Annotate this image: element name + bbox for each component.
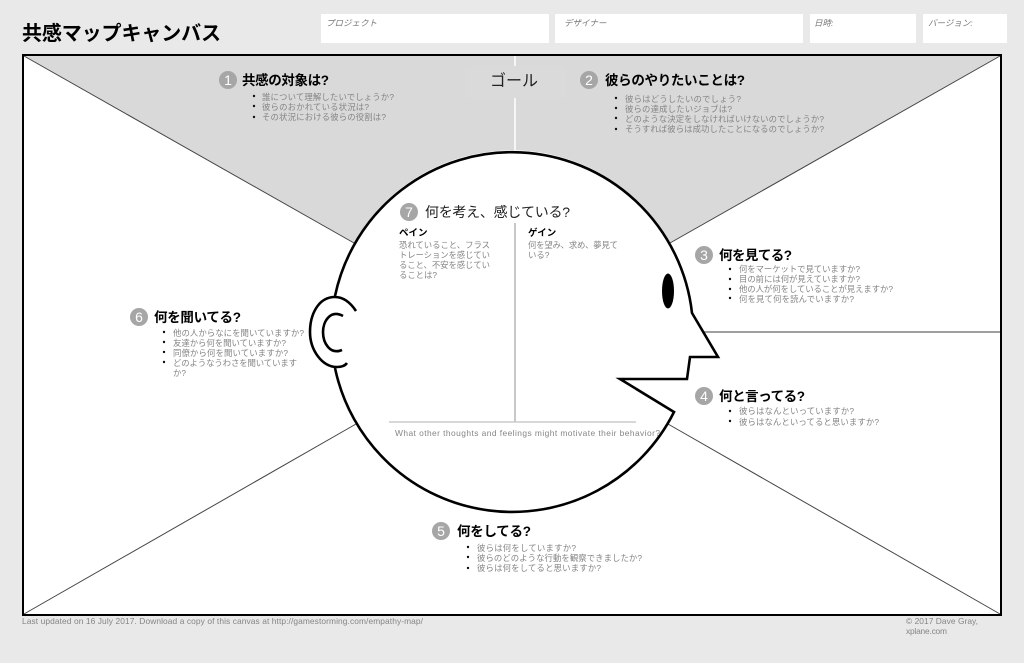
- gains: ゲイン: [528, 227, 556, 239]
- ear outer: [310, 297, 356, 367]
- section 2: what they need to do: 彼らの達成したいジョブは?: [625, 104, 732, 114]
- field: version: [923, 14, 1007, 43]
- section 5: do: 5: [437, 523, 445, 539]
- ear inner: [323, 314, 343, 351]
- section 3: see: 何を見てる?: [719, 248, 792, 263]
- section 5: do: 彼らのどのような行動を観察できましたか?: [477, 553, 642, 563]
- section 1: who: 誰について理解したいでしょうか?: [262, 92, 394, 102]
- diagonal divider: upper right: [670, 56, 1000, 243]
- section 4: say: 何と言ってる?: [719, 389, 805, 404]
- section 6: hear: [130, 308, 304, 378]
- gains: いる?: [528, 250, 550, 260]
- section 1: who: その状況における彼らの役割は?: [262, 112, 386, 122]
- pains: [399, 228, 490, 280]
- diagonal divider: lower left: [24, 424, 356, 614]
- section 2: what they need to do: 2: [585, 72, 593, 88]
- section 6: hear: か?: [173, 368, 186, 378]
- field: date: [810, 14, 916, 43]
- field: project: [321, 14, 549, 43]
- section 2: what they need to do: どのような決定をしなければいけないのでしょうか?: [625, 114, 824, 124]
- section 7: think and feel: 何を考え、感じている?: [425, 204, 570, 220]
- section 1: who: 共感の対象は?: [242, 72, 329, 88]
- section 3: see: 他の人が何をしていることが見えますか?: [739, 284, 893, 294]
- section 1: who: [219, 71, 394, 122]
- eye: [662, 274, 674, 308]
- section 4: say: 4: [700, 388, 708, 404]
- horizontal divider: [389, 421, 636, 423]
- section 1: who: 彼らのおかれている状況は?: [262, 102, 369, 112]
- field: version: バージョン:: [928, 18, 973, 28]
- footer note: Last updated on 16 July 2017. Download a copy of this canvas at http://gamestorming.com/empathy-map/: [22, 616, 424, 626]
- diagonal divider: upper left: [24, 56, 354, 243]
- section 5: do: 彼らは何をしていますか?: [477, 543, 576, 553]
- field: date: 日時:: [814, 18, 834, 28]
- title: 共感マップキャンバス: [22, 21, 221, 45]
- section 3: see: 何を見て何を読んでいますか?: [739, 294, 854, 304]
- section 3: see: 目の前には何が見えていますか?: [739, 274, 860, 284]
- copyright: [906, 616, 978, 636]
- section 5: do: 彼らは何をしてると思いますか?: [477, 563, 601, 573]
- field: project: プロジェクト: [326, 18, 377, 28]
- head fill: [335, 152, 718, 512]
- section 5: do: [432, 522, 642, 573]
- section 3: see: 何をマーケットで見ていますか?: [739, 264, 860, 274]
- section 3: see: [695, 246, 893, 304]
- section 2: what they need to do: 彼らのやりたいことは?: [605, 72, 745, 88]
- section 1: who: 1: [224, 72, 232, 88]
- goal label: ゴール: [490, 71, 538, 90]
- section 2: what they need to do: そうすれば彼らは成功したことになるのでしょうか?: [625, 124, 824, 134]
- vertical divider: [514, 223, 516, 422]
- goal divider: [514, 56, 516, 152]
- gains: [528, 227, 618, 260]
- field: designer: [555, 14, 803, 43]
- field: designer: デザイナー: [564, 18, 607, 28]
- section 3: see: 3: [700, 247, 708, 263]
- section 2: what they need to do: [580, 71, 824, 134]
- goal label: [465, 66, 566, 98]
- pains: ペイン: [399, 228, 428, 239]
- other thoughts prompt: What other thoughts and feelings might motivate their behavior?: [395, 428, 660, 438]
- horizontal divider: see and say: [699, 331, 1000, 333]
- section 6: hear: 同僚から何を聞いていますか?: [173, 348, 288, 358]
- section 7: think and feel: [389, 203, 660, 438]
- pains: トレーションを感じてい: [399, 250, 490, 260]
- section 5: do: 何をしてる?: [457, 524, 531, 539]
- diagonal divider: lower right: [668, 424, 1000, 614]
- section 4: say: 彼らはなんといってると思いますか?: [739, 417, 879, 427]
- section 6: hear: 6: [135, 309, 143, 325]
- section 6: hear: どのようなうわさを聞いています: [173, 358, 297, 368]
- section 6: hear: 何を聞いてる?: [154, 310, 241, 325]
- section 4: say: 彼らはなんといっていますか?: [739, 406, 854, 416]
- copyright: xplane.com: [906, 626, 947, 636]
- pains: ることは?: [399, 270, 437, 280]
- section 6: hear: 他の人からなにを聞いていますか?: [173, 328, 304, 338]
- gains: 何を望み、求め、夢見て: [528, 240, 618, 250]
- pains: ること、不安を感じてい: [399, 260, 490, 270]
- head illustration: [310, 152, 718, 512]
- section 2: what they need to do: 彼らはどうしたいのでしょう?: [625, 94, 741, 104]
- section 6: hear: 友達から何を聞いていますか?: [173, 338, 286, 348]
- pains: 恐れていること、フラス: [399, 240, 490, 250]
- head outline: [335, 152, 718, 512]
- section 7: think and feel: 7: [405, 204, 413, 220]
- section 4: say: [695, 387, 879, 427]
- panel: goal region: [24, 56, 1000, 243]
- copyright: © 2017 Dave Gray,: [906, 616, 978, 626]
